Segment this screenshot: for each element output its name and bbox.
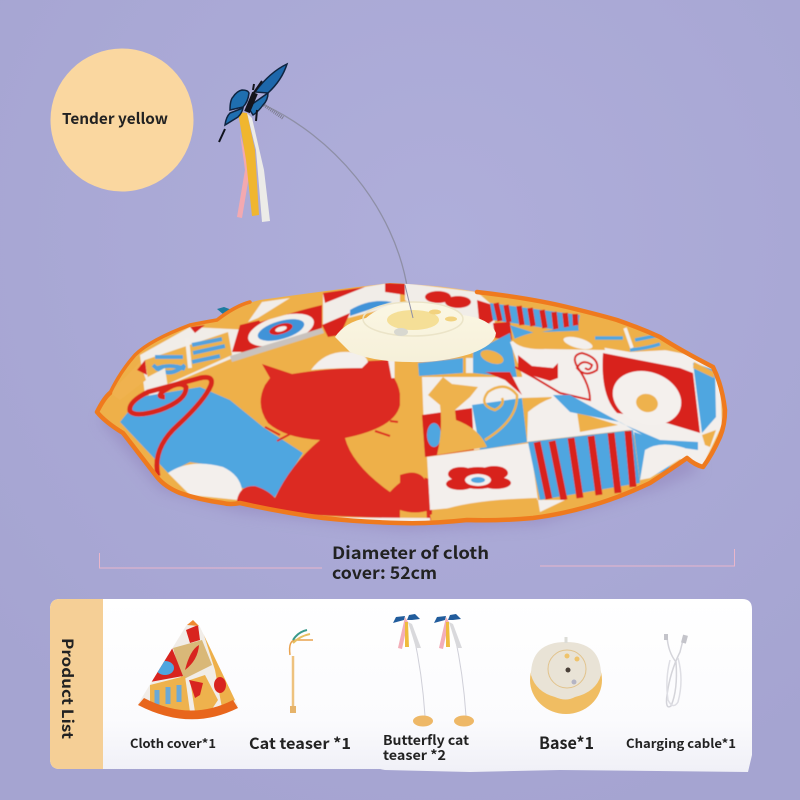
cloth orange piping — [97, 292, 725, 523]
product list panel — [50, 599, 752, 772]
colour swatch: tender yellow — [50, 48, 194, 192]
red swirl cat tail — [130, 377, 212, 476]
butterfly teaser wand — [219, 64, 408, 292]
motor base — [335, 285, 496, 362]
small toy tip behind cloth — [217, 307, 238, 315]
top patch with red flower — [405, 283, 496, 330]
label: charging cable: Charging cable*1 — [626, 733, 736, 752]
blue fish shape — [553, 395, 698, 450]
cloth base colour — [90, 275, 730, 530]
dimension line — [100, 539, 734, 584]
red cat silhouette — [237, 360, 432, 520]
item: base — [530, 637, 602, 754]
lower yellow shape — [429, 498, 538, 520]
big blue area — [120, 387, 303, 500]
item: cloth cover — [130, 620, 238, 748]
patterned cloth cover — [90, 275, 730, 530]
blue upper patches — [418, 322, 580, 378]
label: butterfly cat teaser: Butterfly cat — [383, 729, 469, 749]
product list tab — [50, 599, 103, 769]
item: cat teaser — [249, 630, 351, 754]
label: cloth cover: Cloth cover*1 — [130, 733, 216, 752]
upper yellow shape and leaves — [512, 328, 668, 352]
colour swatch: tender yellow: Tender yellow — [62, 108, 168, 129]
top stripes panel — [490, 303, 580, 333]
right edge blue — [693, 363, 716, 433]
yellow cat panel — [422, 372, 618, 457]
infographic canvas — [50, 48, 752, 772]
white flower panel — [427, 443, 538, 510]
white half circle — [168, 464, 242, 500]
right white patch — [510, 332, 722, 465]
dimension label: cover: 52cm — [332, 559, 437, 584]
butterfly teaser right — [434, 614, 474, 726]
label: cat teaser: Cat teaser *1 — [249, 732, 351, 754]
label: base: Base*1 — [539, 730, 594, 754]
cloth shadow — [100, 400, 700, 530]
label: butterfly cat teaser: teaser *2 — [383, 744, 446, 764]
red cat and spiral — [515, 353, 597, 400]
item: charging cable — [626, 634, 736, 752]
upper left patchwork — [136, 283, 406, 396]
red and blue stripes panel — [528, 430, 640, 500]
product list tab: Product List — [57, 638, 79, 740]
red egg shape — [603, 353, 700, 434]
central yellow band patches — [399, 396, 428, 518]
item: butterfly teasers — [383, 614, 474, 764]
white semicircle above cat — [311, 352, 368, 370]
dimension label: Diameter of cloth — [332, 539, 489, 564]
butterfly teaser left — [393, 614, 433, 726]
